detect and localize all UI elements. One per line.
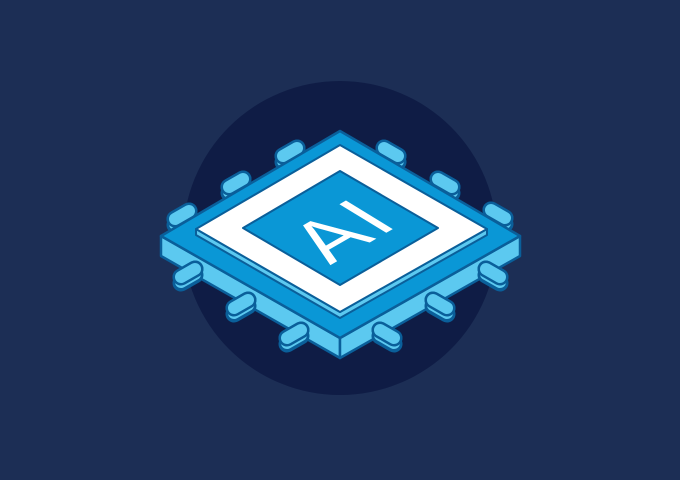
white plate <box>196 145 487 318</box>
inner AI square <box>243 171 438 285</box>
background circle <box>183 81 497 395</box>
back pins <box>175 148 505 225</box>
AI label: AI <box>269 186 417 274</box>
front pins <box>181 269 500 344</box>
chip base <box>161 131 520 358</box>
